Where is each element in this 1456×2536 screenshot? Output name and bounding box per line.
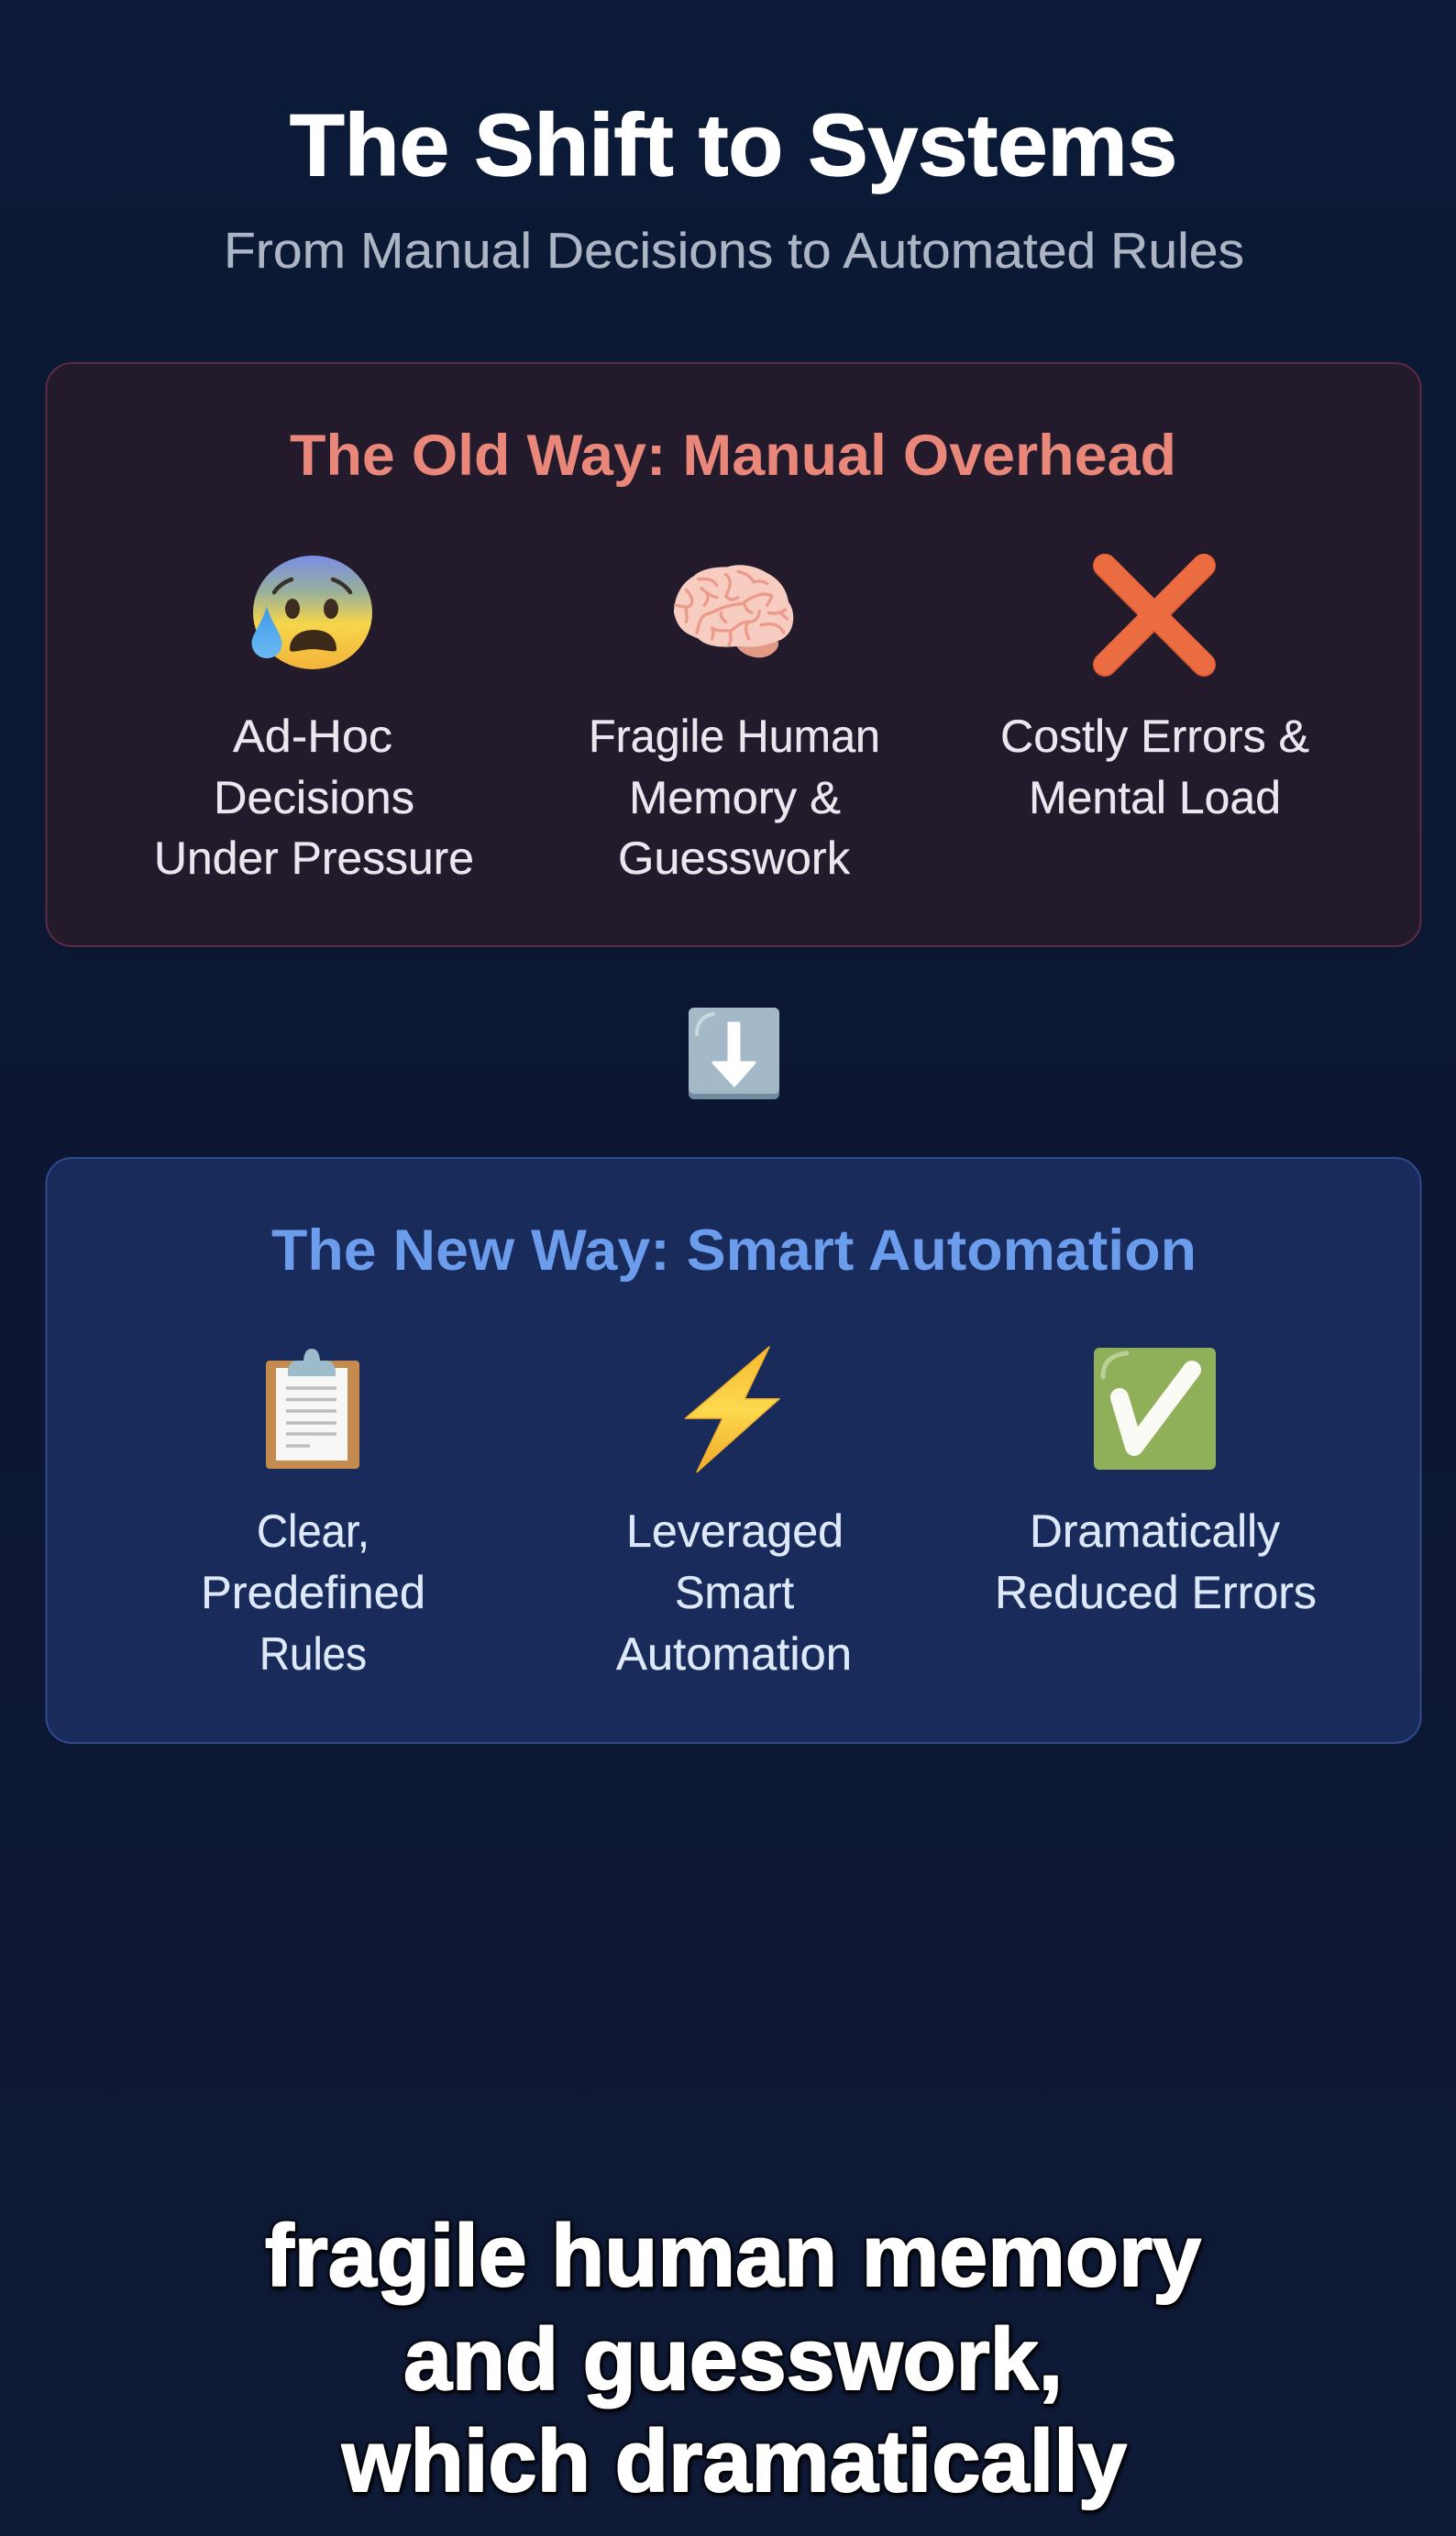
panel: the new way <box>46 1158 1421 1743</box>
label: leveraged smart automation <box>616 1505 852 1680</box>
icon: brain <box>674 565 793 657</box>
label: fragile human memory: Guesswork <box>618 832 851 884</box>
icon: clipboard <box>266 1349 359 1469</box>
label: clear predefined rules: Clear, <box>257 1505 370 1557</box>
label: leveraged smart automation: Smart <box>675 1567 794 1618</box>
icon: lightning bolt <box>686 1347 779 1472</box>
label: ad-hoc decisions: Decisions <box>214 772 414 823</box>
label: ad-hoc decisions <box>154 711 474 884</box>
label: leveraged smart automation: Leveraged <box>626 1505 844 1557</box>
panel: the old way <box>46 363 1421 946</box>
label: clear predefined rules: Rules <box>259 1628 367 1680</box>
heading: old way: The Old Way: Manual Overhead <box>290 424 1176 488</box>
icon: red cross <box>1105 565 1204 665</box>
label: costly errors <box>1000 711 1309 823</box>
icon: anxious face with sweat <box>251 556 372 669</box>
caption: and guesswork, <box>403 2310 1063 2409</box>
arrow: down arrow button <box>689 1008 779 1099</box>
label: clear predefined rules <box>201 1505 425 1680</box>
label: dramatically reduced errors <box>995 1505 1317 1618</box>
label: clear predefined rules: Predefined <box>201 1567 425 1618</box>
icon: check mark <box>1094 1348 1216 1470</box>
subtitle: From Manual Decisions to Automated Rules <box>224 222 1244 279</box>
label: costly errors: Costly Errors & <box>1000 711 1309 762</box>
label: fragile human memory: Fragile Human <box>589 711 880 762</box>
label: ad-hoc decisions: Under Pressure <box>154 832 474 884</box>
title: The Shift to Systems <box>290 96 1177 194</box>
label: fragile human memory <box>589 711 880 884</box>
label: ad-hoc decisions: Ad-Hoc <box>233 711 392 762</box>
caption <box>265 2207 1201 2510</box>
label: leveraged smart automation: Automation <box>616 1628 852 1680</box>
label: dramatically reduced errors: Reduced Errors <box>995 1567 1317 1618</box>
label: fragile human memory: Memory & <box>629 772 841 823</box>
caption: fragile human memory <box>265 2207 1201 2305</box>
label: costly errors: Mental Load <box>1029 772 1281 823</box>
caption: which dramatically <box>341 2412 1127 2510</box>
heading: new way: The New Way: Smart Automation <box>271 1218 1197 1283</box>
label: dramatically reduced errors: Dramatically <box>1030 1505 1280 1557</box>
